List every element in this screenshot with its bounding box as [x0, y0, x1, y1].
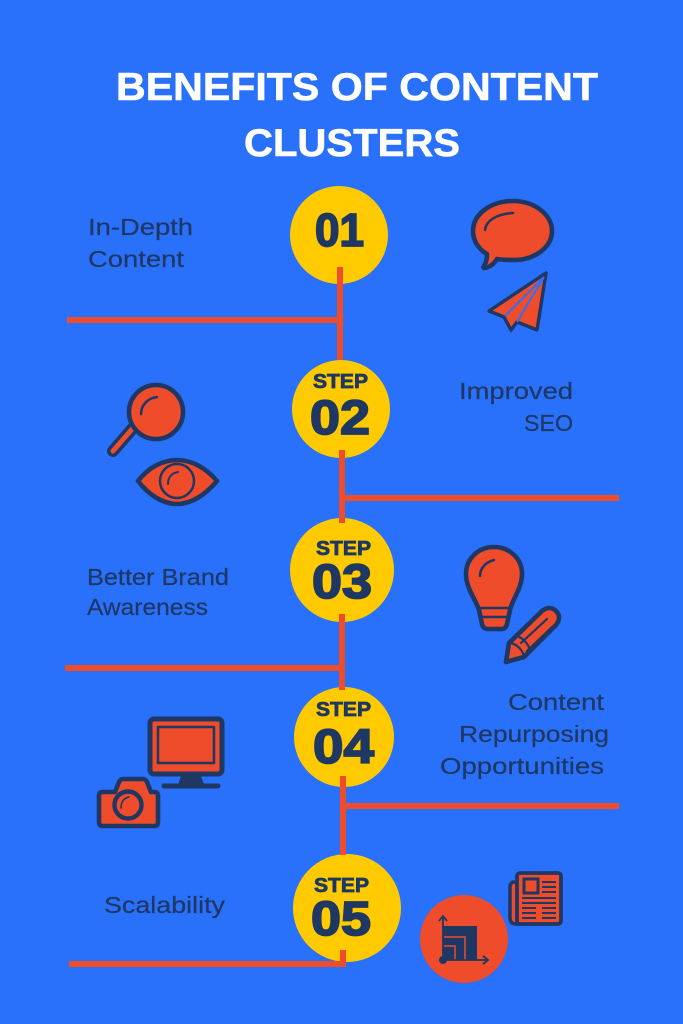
icon: camera [99, 779, 158, 826]
label: Content Repurposing Opportunities: Content [508, 689, 605, 715]
circle: step 04: 04 [313, 721, 374, 774]
icon: newspaper [510, 873, 561, 924]
icon: paper plane [489, 273, 546, 330]
label: Improved SEO: Improved [459, 378, 573, 404]
connector lines [65, 267, 619, 967]
label: Better Brand Awareness [87, 564, 229, 620]
icon: speech bubble [473, 201, 552, 268]
circle: step 01: 01 [315, 204, 364, 256]
circle: step 02 [292, 360, 390, 458]
circle: step 05: 05 [311, 893, 371, 946]
circle: step 04: STEP [316, 699, 371, 721]
circle: step 05 [293, 854, 401, 962]
circle: step 03: STEP [316, 538, 371, 560]
icon: magnifying glass [113, 385, 183, 451]
circle: step 03 [290, 518, 394, 622]
label: Improved SEO [459, 378, 573, 436]
label: Content Repurposing Opportunities: Opportunities [440, 753, 604, 779]
title: CLUSTERS [244, 122, 460, 165]
circle: step 02: 02 [310, 392, 370, 445]
label: In-Depth Content: Content [88, 246, 185, 272]
icon: monitor [150, 719, 222, 786]
label: Content Repurposing Opportunities [440, 689, 609, 779]
icon: light bulb [466, 547, 522, 629]
label: Scalability: Scalability [104, 892, 226, 918]
label: Content Repurposing Opportunities: Repurposing [459, 721, 609, 747]
icon: pencil [506, 608, 559, 662]
label: In-Depth Content: In-Depth [88, 214, 193, 240]
circle: step 04 [294, 687, 394, 787]
circle: step 02: STEP [313, 371, 368, 393]
label: Better Brand Awareness: Better Brand [87, 564, 229, 590]
label: Better Brand Awareness: Awareness [87, 594, 208, 620]
title: BENEFITS OF CONTENT [116, 66, 598, 109]
icon: scaling chart in circle [420, 895, 508, 983]
circle: step 05: STEP [314, 875, 369, 897]
title [116, 66, 598, 165]
label: Improved SEO: SEO [524, 410, 573, 436]
label: In-Depth Content [88, 214, 193, 272]
circle: step 03: 03 [312, 556, 372, 609]
circle: step 01 [290, 186, 388, 284]
icon: eye [138, 460, 217, 504]
